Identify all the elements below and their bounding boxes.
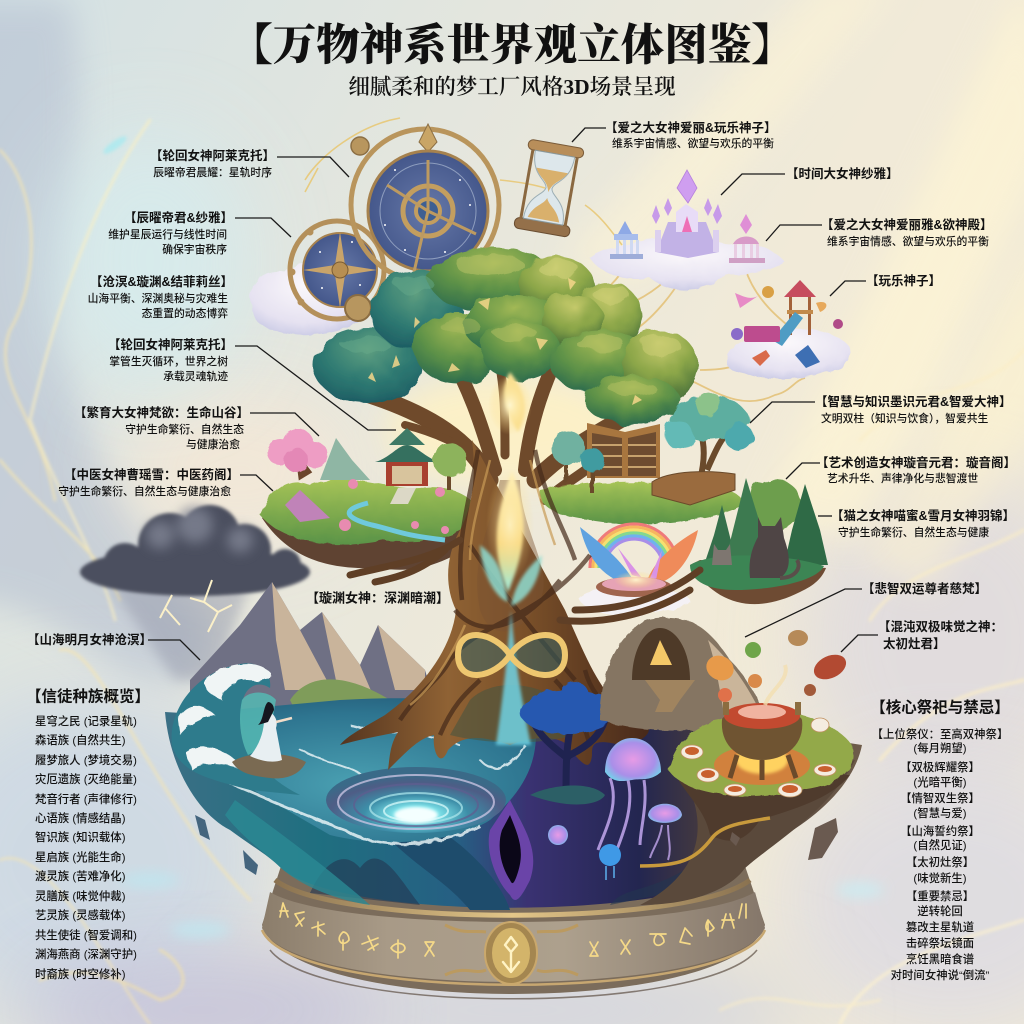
- toy tower and slide: [731, 280, 843, 368]
- label: taste god: 太初灶君】: [883, 636, 946, 651]
- goddess on rock: [232, 702, 306, 778]
- label: cat goddess: 守护生命繁衍、自然生态与健康: [838, 525, 989, 539]
- ocean surface: [172, 698, 536, 842]
- playground cloud: [726, 280, 851, 379]
- panel: believer races: 星穹之民 (记录星轨): [35, 714, 137, 728]
- label: mountain sea goddess: [27, 632, 200, 660]
- tiny purple jellyfish: [548, 825, 568, 845]
- golden spirit stream: [640, 818, 770, 866]
- world tree upper branches: [370, 340, 650, 500]
- label: wisdom and knowledge: 文明双柱（知识与饮食），智爱共生: [821, 411, 989, 425]
- vortex funnel: [385, 830, 510, 910]
- round tree: [749, 479, 801, 531]
- label: love temple: 【爱之大女神爱丽雅&欲神殿】: [821, 217, 993, 232]
- panel: core rites and taboos: (味觉新生): [913, 871, 967, 885]
- island grass: [690, 555, 824, 590]
- panel: believer races: 【信徒种族概览】: [26, 686, 150, 706]
- panel: core rites and taboos: (智慧与爱): [913, 806, 967, 820]
- label: taste god: [841, 619, 1003, 652]
- rain haze under storm: [110, 585, 250, 680]
- label: cangming xuanyuan: 【沧溟&璇渊&结菲莉丝】: [90, 274, 233, 289]
- label: cangming xuanyuan: 态重置的动态博弈: [142, 306, 228, 320]
- label: chenyao and shaya: 【辰曜帝君&纱雅】: [124, 210, 233, 225]
- label: wheel goddess tree: 承载灵魂轨迹: [163, 369, 228, 383]
- lightning: [160, 580, 232, 632]
- constellation path: [305, 118, 622, 245]
- icon: large astrolabe clock: [351, 124, 499, 281]
- terrace building: [652, 472, 735, 505]
- canopy highlights: [341, 254, 680, 395]
- panel: believer races: 星启族 (光能生命): [35, 850, 126, 864]
- wave crest foam: [210, 725, 525, 844]
- rainbow: [590, 524, 678, 568]
- label: play child: [830, 273, 941, 296]
- label: cat goddess: 【猫之女神喵蜜&雪月女神羽锦】: [831, 508, 1015, 523]
- pine trees: [704, 478, 828, 565]
- panel: believer races: 时裔族 (时空修补): [35, 967, 126, 981]
- label: cangming xuanyuan: [88, 274, 233, 320]
- cuisine island: [668, 630, 853, 841]
- storm cloud: [80, 505, 310, 632]
- label: chenyao and shaya: [108, 210, 291, 256]
- label: compassion wisdom: [745, 581, 987, 637]
- label: wheel goddess tree: 掌管生灭循环，世界之树: [109, 354, 228, 368]
- distant mountains: [190, 582, 440, 720]
- cauldron: [722, 665, 802, 780]
- floating island: cats: [578, 478, 828, 616]
- teal wisdom tree: [666, 391, 752, 480]
- tree canopy: [314, 248, 698, 424]
- small jellyfish: [648, 804, 682, 860]
- label: abyss goddess: 【璇渊女神：深渊暗潮】: [306, 590, 449, 606]
- label: play child: 【玩乐神子】: [866, 273, 941, 288]
- blue abyss tree: [520, 682, 616, 804]
- right pink pagoda: [729, 214, 765, 263]
- pink blossom tree: [267, 429, 328, 478]
- label: art goddess: 【艺术创造女神璇音元君：璇音阁】: [816, 455, 1016, 470]
- rock right flank: [640, 760, 855, 905]
- whirlpool: [326, 767, 506, 833]
- label: art goddess: 艺术升华、声律净化与悲智渡世: [827, 471, 978, 485]
- flying food: [702, 630, 850, 702]
- world bowl: [165, 712, 862, 910]
- altar cloud: [578, 588, 690, 616]
- center medallion: [445, 922, 578, 984]
- panel: core rites and taboos: 【重要禁忌】: [906, 889, 974, 903]
- flowers: [339, 479, 449, 534]
- small cat: [712, 544, 732, 565]
- panel: believer races: 渡灵族 (苦难净化): [35, 869, 126, 883]
- label: love temple: 维系宇宙情感、欲望与欢乐的平衡: [827, 234, 989, 248]
- label: mountain sea goddess: 【山海明月女神沧溟】: [27, 632, 152, 647]
- label: wisdom and knowledge: 【智慧与知识墨识元君&智爱大神】: [815, 394, 1012, 409]
- label: chenyao and shaya: 确保宇宙秩序: [162, 242, 227, 256]
- panel: believer races: 智识族 (知识载体): [35, 830, 126, 844]
- icon: small astrolabe clock: [288, 221, 384, 321]
- panel: believer races: 渊海燕商 (深渊守护): [35, 947, 137, 961]
- bowl body: [165, 712, 862, 908]
- floating rock fragments: [195, 815, 838, 875]
- label: cangming xuanyuan: 山海平衡、深渊奥秘与灾难生: [88, 291, 228, 305]
- label: chenyao and shaya: 维护星辰运行与线性时间: [108, 227, 227, 241]
- glowing waterfall: [496, 610, 531, 745]
- infinity symbol: [458, 635, 565, 675]
- panel: believer races: [26, 686, 150, 981]
- label: wheel goddess top: [150, 148, 349, 179]
- panel: core rites and taboos: [870, 698, 1010, 982]
- panel: core rites and taboos: 对时间女神说“倒流”: [891, 968, 990, 982]
- label: love temple: [766, 217, 993, 248]
- island grass: [260, 479, 480, 545]
- large cat: [749, 517, 799, 578]
- dishes around pot: [681, 718, 836, 797]
- glowing heart: [504, 372, 525, 432]
- panel: believer races: 心语族 (情感结晶): [35, 811, 126, 825]
- label: wheel goddess top: 辰曜帝君晨耀：星轨时序: [153, 165, 272, 179]
- tree beside pagoda: [433, 443, 467, 490]
- main crystal temple: [652, 170, 722, 258]
- large jellyfish: [598, 738, 661, 855]
- panel: believer races: 梵音行者 (声律修行): [35, 792, 137, 806]
- island rock: [690, 560, 826, 604]
- pagoda: [375, 428, 440, 504]
- big wave: [172, 663, 300, 795]
- small trees: [551, 431, 604, 493]
- side roots to islands: [350, 540, 700, 621]
- panel: believer races: 艺灵族 (灵感载体): [35, 908, 126, 922]
- label: medicine goddess: 守护生命繁衍、自然生态与健康治愈: [58, 484, 231, 498]
- panel: core rites and taboos: 击碎祭坛镜面: [906, 936, 974, 950]
- panel: core rites and taboos: (光暗平衡): [913, 775, 967, 789]
- blue jellyfish: [599, 844, 621, 880]
- pedestal: [262, 866, 765, 999]
- island grass: [668, 711, 853, 796]
- label: life valley: 【繁育大女神梵欲：生命山谷】: [74, 405, 249, 420]
- label: compassion wisdom: 【悲智双运尊者慈梵】: [862, 581, 987, 596]
- label: cat goddess: [818, 508, 1015, 539]
- island cliff: [672, 770, 850, 841]
- right wing: [648, 530, 698, 585]
- panel: core rites and taboos: (自然见证): [913, 838, 967, 852]
- library building: [587, 423, 660, 478]
- panel: believer races: 灵膳族 (味觉仲裁): [35, 889, 126, 903]
- label: wheel goddess tree: [108, 337, 396, 430]
- cloud under clocks: [251, 264, 362, 335]
- panel: believer races: 灾厄遗族 (灭绝能量): [35, 772, 137, 786]
- panel: core rites and taboos: 【上位祭仪：至高双神祭】: [872, 727, 1008, 741]
- tree glowing leaves: [368, 278, 642, 405]
- panel: core rites and taboos: 篡改主星轨道: [906, 920, 975, 934]
- floating island: library: [539, 391, 752, 524]
- glow behind branches: [385, 375, 625, 485]
- label: love goddess and play child: 【爱之大女神爱丽&玩乐神子】: [605, 120, 777, 135]
- mountain: [320, 438, 370, 480]
- sky palace on clouds: [590, 170, 785, 290]
- label: taste god: 【混沌双极味觉之神：: [878, 619, 1003, 634]
- label: time goddess: [721, 166, 899, 195]
- panel: core rites and taboos: 烹饪黑暗食谱: [906, 952, 974, 966]
- label: love goddess and play child: [572, 120, 777, 150]
- panel: core rites and taboos: 逆转轮回: [917, 904, 963, 918]
- icon: hourglass: [514, 139, 584, 237]
- panel: core rites and taboos: 【太初灶祭】: [906, 855, 974, 869]
- world tree trunk: [340, 372, 700, 770]
- teal cliff: [225, 800, 370, 905]
- gold threads from clouds to tree: [590, 255, 805, 401]
- left wing: [580, 527, 640, 585]
- title: 【万物神系世界观立体图鉴】: [229, 22, 795, 70]
- palace cloud: [590, 239, 785, 290]
- rocky cave hill: [600, 617, 768, 731]
- altar disc: [596, 577, 672, 597]
- label: life valley: 守护生命繁衍、自然生态: [125, 422, 244, 436]
- label: life valley: 与健康治愈: [186, 437, 240, 451]
- river: [349, 503, 445, 540]
- label: wheel goddess tree: 【轮回女神阿莱克托】: [108, 337, 233, 352]
- panel: core rites and taboos: 【双极辉耀祭】: [900, 760, 980, 774]
- panel: core rites and taboos: 【情智双生祭】: [900, 791, 980, 805]
- panel: believer races: 森语族 (自然共生): [35, 733, 126, 747]
- panel: believer races: 履梦旅人 (梦境交易): [35, 753, 137, 767]
- fire ring: [714, 745, 810, 785]
- panel: core rites and taboos: 【山海誓约祭】: [900, 824, 980, 838]
- island rock underside: [262, 510, 480, 570]
- label: love goddess and play child: 维系宇宙情感、欲望与欢乐的平衡: [612, 136, 774, 150]
- panel: core rites and taboos: 【核心祭祀与禁忌】: [870, 698, 1010, 716]
- label: life valley: [74, 405, 319, 451]
- label: medicine goddess: 【中医女神曹瑶雪：中医药阁】: [64, 467, 239, 482]
- panel: core rites and taboos: (每月朔望): [913, 741, 967, 755]
- dark rocks in bowl: [310, 858, 731, 905]
- rune band: [280, 903, 746, 958]
- abyss rift: [489, 800, 533, 900]
- rock: [232, 754, 306, 778]
- panel: believer races: 共生使徒 (智爱调和): [35, 928, 137, 942]
- rainbow altar: [578, 524, 698, 616]
- figure: [250, 712, 282, 762]
- label: wisdom and knowledge: [750, 394, 1012, 425]
- label: time goddess: 【时间大女神纱雅】: [786, 166, 899, 181]
- label: wheel goddess top: 【轮回女神阿莱克托】: [150, 148, 275, 163]
- library platform: [539, 482, 742, 524]
- label: medicine goddess: [58, 467, 273, 498]
- floating island: life valley: [260, 428, 480, 570]
- subtitle: 细腻柔和的梦工厂风格3D场景呈现: [348, 75, 676, 99]
- label: art goddess: [786, 455, 1016, 485]
- left blue pagoda: [610, 221, 643, 259]
- rocks: [285, 490, 330, 522]
